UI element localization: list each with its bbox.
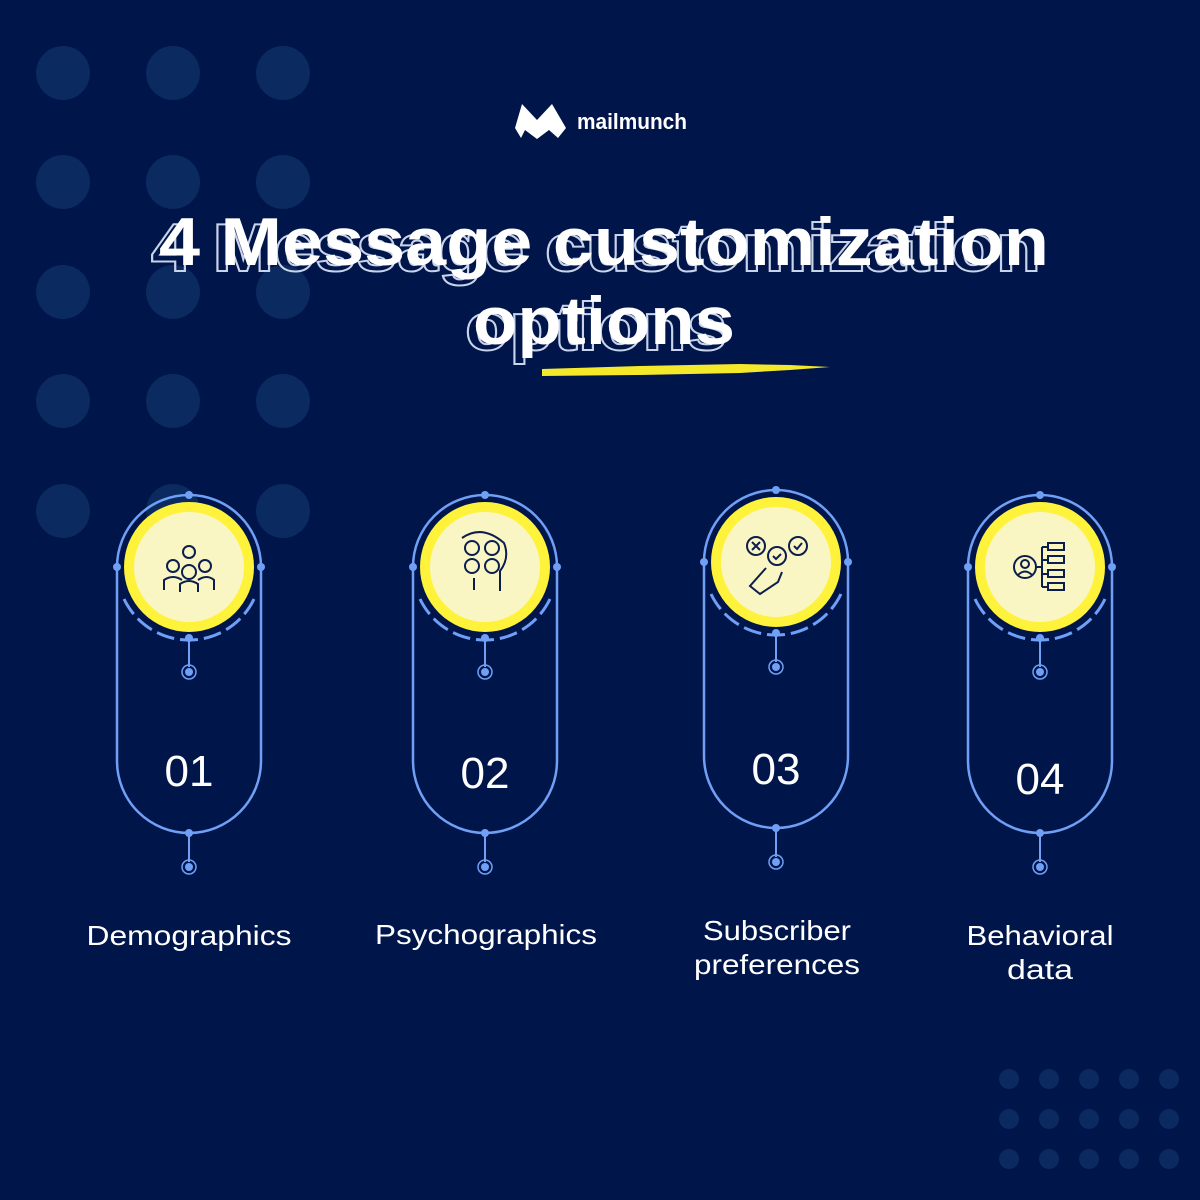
- title: 4 Message customization: [159, 204, 1049, 280]
- title: [151, 204, 1049, 365]
- card 3: 03: [752, 745, 800, 794]
- card 2: 02: [461, 749, 509, 798]
- icon: faces: [462, 532, 506, 591]
- card 4: data: [1007, 954, 1074, 985]
- card 4: 04: [1016, 755, 1064, 804]
- title: 4 Message customization: [151, 210, 1041, 286]
- card 1: 01: [165, 747, 213, 796]
- card 1: [86, 491, 292, 951]
- card 2: Psychographics: [375, 919, 597, 950]
- card 4: Behavioral: [966, 920, 1114, 951]
- title: options: [465, 289, 727, 365]
- icon: people: [164, 546, 214, 592]
- background dots left: [36, 46, 310, 538]
- card 3: Subscriber: [703, 915, 851, 946]
- logo: mailmunch: [577, 109, 687, 134]
- card 3: preferences: [694, 949, 860, 980]
- icon: choice hand: [747, 537, 807, 594]
- logo: [515, 104, 687, 139]
- icon: profile data: [1014, 543, 1064, 590]
- background dots right: [999, 1069, 1179, 1169]
- title: options: [473, 283, 735, 359]
- card 3: [694, 486, 860, 980]
- card 2: [375, 491, 597, 950]
- underline brush: [542, 364, 830, 376]
- card 4: [964, 491, 1116, 985]
- card 1: Demographics: [86, 920, 292, 951]
